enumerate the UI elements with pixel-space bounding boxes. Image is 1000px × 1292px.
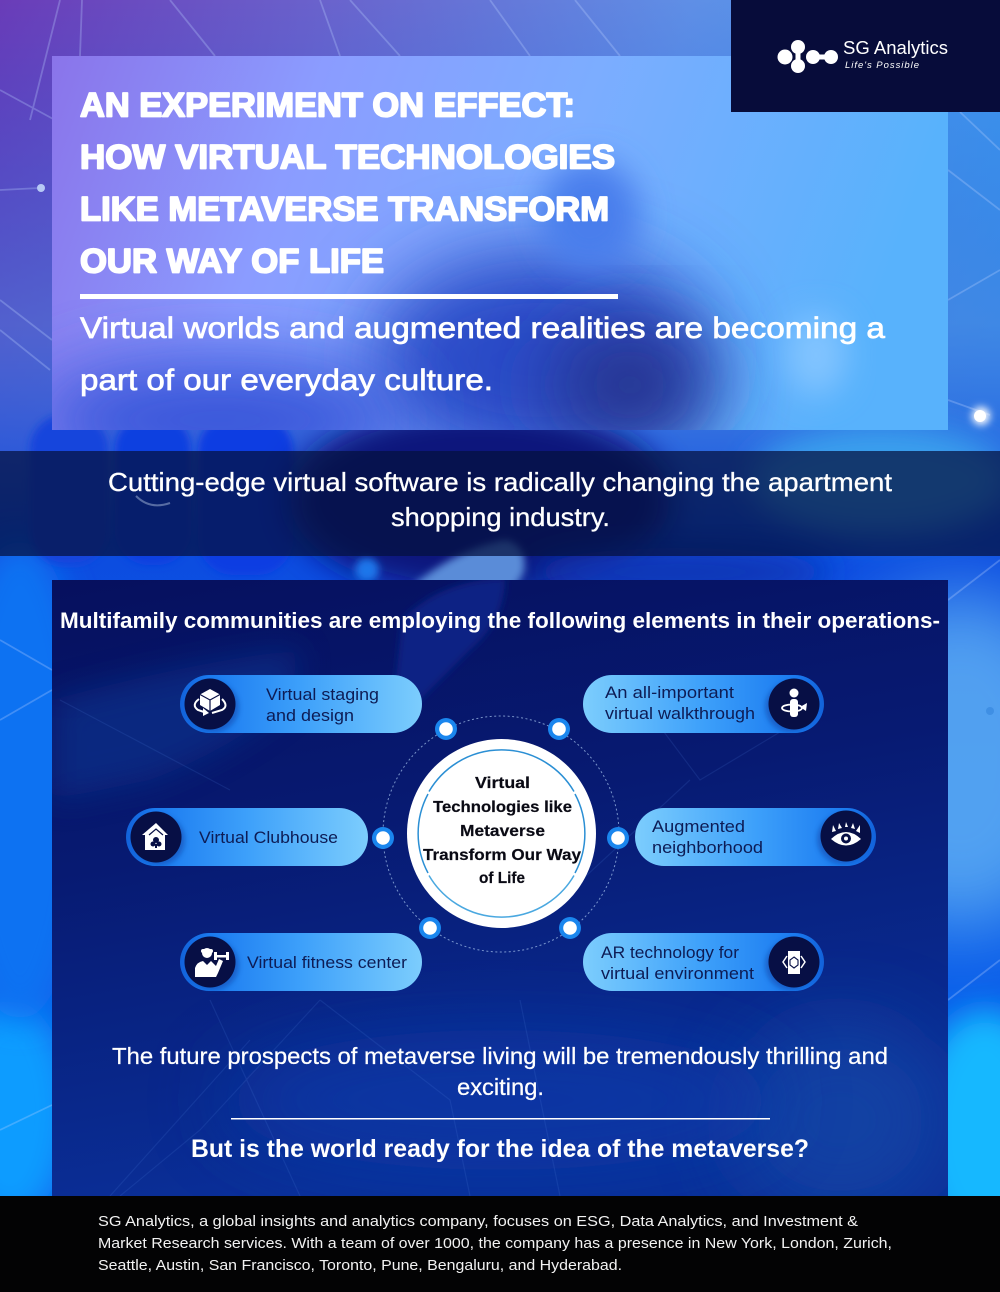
- logo text: SG Analytics: [843, 38, 948, 58]
- icon: SG Analytics logo mark: [778, 40, 838, 73]
- pill: virtual walkthrough: virtual walkthrough: [605, 704, 755, 723]
- closing question: But is the world ready for the idea of the metaverse?: [191, 1135, 809, 1163]
- pill: virtual walkthrough: [583, 675, 824, 733]
- hub text: Metaverse: [460, 823, 545, 840]
- panel: multifamily elements: [52, 578, 950, 1220]
- icon: person with dumbbell: [195, 948, 229, 977]
- subtitle: part of our everyday culture.: [80, 364, 493, 397]
- band: intro statement: Cutting-edge virtual software is radically changing the apartment: [108, 467, 893, 497]
- pill: AR technology: virtual environment: [601, 964, 754, 983]
- pill: augmented neighborhood: neighborhood: [652, 838, 763, 857]
- pill: virtual clubhouse: Virtual Clubhouse: [199, 828, 338, 847]
- band: intro statement: [0, 451, 1000, 556]
- hub text: of Life: [479, 870, 525, 887]
- icon: rotating cube: [195, 689, 226, 716]
- footer: [0, 1196, 1000, 1292]
- orbit nodes: [372, 718, 629, 939]
- heading: AN EXPERIMENT ON EFFECT:: [80, 86, 575, 124]
- icon: eye: [831, 822, 861, 846]
- icon: AR phone: [783, 951, 805, 974]
- heading: HOW VIRTUAL TECHNOLOGIES: [80, 138, 615, 176]
- hub text: [423, 775, 581, 887]
- logo text: [843, 38, 948, 71]
- heading: OUR WAY OF LIFE: [80, 242, 384, 280]
- closing statement: exciting.: [457, 1074, 544, 1100]
- heading: [80, 86, 615, 280]
- footer: SG Analytics, a global insights and analytics company, focuses on ESG, Data Analytics, and Investment &: [98, 1213, 858, 1230]
- closing statement: [112, 1043, 888, 1100]
- pill: virtual fitness center: Virtual fitness center: [247, 953, 407, 972]
- lead-in text: Multifamily communities are employing the following elements in their operations-: [60, 608, 940, 633]
- footer: Seattle, Austin, San Francisco, Toronto, Pune, Bengaluru, and Hyderabad.: [98, 1257, 622, 1274]
- pill: virtual clubhouse: [126, 808, 368, 866]
- icon: house with club: [142, 823, 168, 850]
- closing statement: The future prospects of metaverse living will be tremendously thrilling and: [112, 1043, 888, 1069]
- subtitle: [80, 312, 885, 397]
- pill: virtual staging and design: and design: [266, 706, 354, 725]
- pill: AR technology: AR technology for: [601, 943, 739, 962]
- pill: virtual staging and design: Virtual staging: [266, 685, 379, 704]
- hub text: Virtual: [475, 775, 530, 792]
- logo box: [731, 0, 1000, 112]
- pill: virtual walkthrough: An all-important: [605, 683, 734, 702]
- pill: augmented neighborhood: Augmented: [652, 817, 745, 836]
- pill: AR technology: [583, 933, 824, 991]
- icon: person with rotation arrow: [782, 688, 807, 717]
- panel: title card: [52, 56, 948, 430]
- central hub circle: [407, 739, 596, 928]
- pill: virtual staging and design: [180, 675, 422, 733]
- heading: LIKE METAVERSE TRANSFORM: [80, 190, 609, 228]
- dotted orbit: [383, 716, 619, 952]
- logo text: Life's Possible: [845, 60, 919, 71]
- pill: augmented neighborhood: [635, 808, 876, 866]
- subtitle: Virtual worlds and augmented realities are becoming a: [80, 312, 885, 345]
- pill: virtual fitness center: [180, 933, 422, 991]
- footer: Market Research services. With a team of over 1000, the company has a presence in New York, London, Zurich,: [98, 1235, 892, 1252]
- hub text: Technologies like: [433, 799, 572, 816]
- hub text: Transform Our Way: [423, 847, 581, 864]
- band: intro statement: shopping industry.: [391, 502, 610, 532]
